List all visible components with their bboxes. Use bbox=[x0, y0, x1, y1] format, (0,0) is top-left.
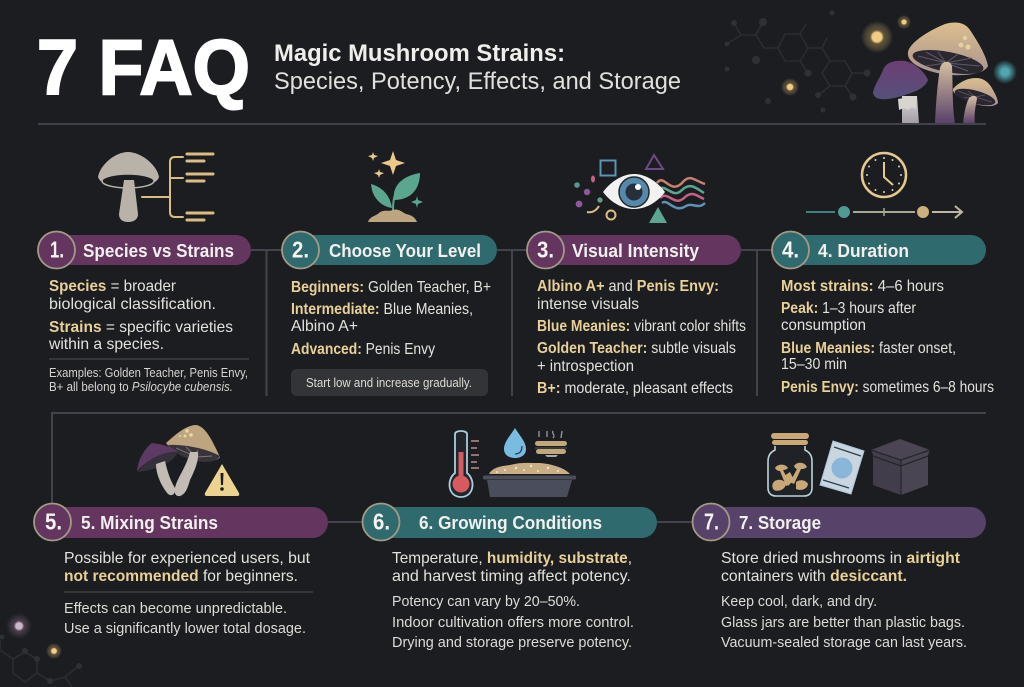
text block 4: Peak: 1–3 hours after bbox=[781, 300, 917, 317]
text block 2: Advanced: Penis Envy bbox=[291, 341, 435, 358]
text block 1: B+ all belong to Psilocybe cubensis. bbox=[49, 380, 233, 394]
header pill 7 bbox=[692, 504, 986, 540]
header pill 6: 6. Growing Conditions bbox=[419, 513, 602, 533]
text block 1: within a species. bbox=[48, 336, 164, 353]
text block 4: 15–30 min bbox=[781, 356, 847, 373]
divider bbox=[38, 123, 986, 125]
text block 4: Blue Meanies: faster onset, bbox=[781, 340, 956, 357]
text block 6: Drying and storage preserve potency. bbox=[392, 634, 632, 651]
text block 6: Indoor cultivation offers more control. bbox=[392, 614, 634, 631]
text block 6: and harvest timing affect potency. bbox=[392, 568, 631, 585]
icon: mushrooms with warning triangle bbox=[137, 425, 239, 496]
header pill 6 bbox=[362, 504, 657, 540]
panel: 5 mixing strains bbox=[34, 425, 328, 637]
text block 2: Beginners: Golden Teacher, B+ bbox=[291, 279, 491, 296]
text block 4: Penis Envy: sometimes 6–8 hours bbox=[781, 379, 994, 396]
callout: start low bbox=[291, 369, 488, 396]
text block 7 bbox=[721, 550, 967, 651]
text block 3: intense visuals bbox=[537, 296, 639, 313]
header pill 5: 5. Mixing Strains bbox=[81, 513, 218, 533]
subtitle: Magic Mushroom Strains: bbox=[274, 40, 565, 67]
panel: 4 duration bbox=[772, 153, 994, 396]
subtitle: Species, Potency, Effects, and Storage bbox=[274, 68, 681, 95]
text block 3: Albino A+ and Penis Envy: bbox=[537, 278, 719, 295]
text block 3: Golden Teacher: subtle visuals bbox=[537, 340, 736, 357]
header pill 1: 1. bbox=[50, 236, 64, 262]
callout: start low: Start low and increase gradually. bbox=[306, 375, 472, 390]
text block 1: Examples: Golden Teacher, Penis Envy, bbox=[49, 366, 248, 380]
header pill 3: 3. bbox=[537, 236, 554, 262]
panel: 7 storage bbox=[692, 433, 986, 651]
text block 3: Blue Meanies: vibrant color shifts bbox=[537, 318, 746, 335]
panel: 3 visual intensity bbox=[527, 155, 746, 397]
icon: thermometer, water drop, substrate tray bbox=[449, 428, 576, 497]
text block 2: Intermediate: Blue Meanies, bbox=[291, 301, 473, 318]
text block 5: Use a significantly lower total dosage. bbox=[64, 620, 306, 637]
hero mushrooms illustration bbox=[873, 22, 998, 124]
header pill 5 bbox=[34, 504, 328, 540]
title: 7 FAQ bbox=[37, 23, 250, 111]
panel: 1 species vs strains bbox=[38, 152, 251, 394]
text block 6: Temperature, humidity, substrate, bbox=[392, 550, 632, 567]
text block 3: + introspection bbox=[537, 358, 634, 375]
header pill 1: Species vs Strains bbox=[83, 241, 234, 261]
icon: sprout with sparkles bbox=[368, 151, 423, 222]
text block 1: Strains = specific varieties bbox=[49, 319, 233, 336]
header pill 4 bbox=[772, 232, 986, 268]
text block 1 bbox=[48, 278, 249, 394]
text block 1: biological classification. bbox=[49, 296, 216, 313]
text block 3: B+: moderate, pleasant effects bbox=[537, 380, 733, 397]
panel: 6 growing conditions bbox=[362, 428, 657, 651]
header pill 6: 6. bbox=[373, 508, 390, 534]
icon: clock and timeline bbox=[806, 153, 962, 218]
background molecule: top right bbox=[724, 10, 870, 112]
icon: jar, desiccant packet, box bbox=[768, 433, 930, 496]
icon: mushroom with branching tree bbox=[98, 152, 213, 222]
header pill 7: 7. bbox=[704, 508, 719, 534]
background molecule: bottom left bbox=[0, 634, 82, 687]
text block 7: containers with desiccant. bbox=[721, 568, 907, 585]
connector lines bbox=[52, 250, 986, 522]
header pill 3: Visual Intensity bbox=[572, 241, 699, 261]
text block 4: Most strains: 4–6 hours bbox=[781, 278, 944, 295]
text block 5 bbox=[64, 550, 313, 637]
header pill 2: Choose Your Level bbox=[329, 241, 481, 261]
header pill 3 bbox=[527, 232, 741, 268]
text block 3 bbox=[537, 278, 746, 397]
header pill 4: 4. Duration bbox=[818, 241, 909, 261]
header pill 4: 4. bbox=[782, 236, 799, 262]
text block 5: Effects can become unpredictable. bbox=[64, 600, 287, 617]
panel: 2 choose your level bbox=[282, 151, 497, 396]
text block 7: Keep cool, dark, and dry. bbox=[721, 593, 877, 610]
text block 7: Vacuum-sealed storage can last years. bbox=[721, 634, 967, 651]
header pill 2 bbox=[282, 232, 497, 268]
text block 7: Glass jars are better than plastic bags. bbox=[721, 614, 965, 631]
header pill 5: 5. bbox=[45, 508, 62, 534]
text block 6 bbox=[392, 550, 634, 651]
text block 5: not recommended for beginners. bbox=[64, 568, 298, 585]
text block 2 bbox=[291, 279, 491, 358]
text block 6: Potency can vary by 20–50%. bbox=[392, 593, 580, 610]
header pill 1 bbox=[38, 232, 251, 268]
text block 4: consumption bbox=[781, 317, 866, 334]
text block 5: Possible for experienced users, but bbox=[64, 550, 311, 567]
text block 1: Species = broader bbox=[49, 278, 177, 295]
text block 2: Albino A+ bbox=[291, 318, 358, 335]
text block 7: Store dried mushrooms in airtight bbox=[721, 550, 961, 567]
header pill 7: 7. Storage bbox=[739, 513, 821, 533]
header pill 2: 2. bbox=[292, 236, 309, 262]
text block 4 bbox=[781, 278, 994, 396]
subtitle bbox=[274, 40, 681, 95]
purple mushroom stem bbox=[902, 96, 919, 124]
icon: eye with shapes and waves bbox=[574, 155, 705, 223]
